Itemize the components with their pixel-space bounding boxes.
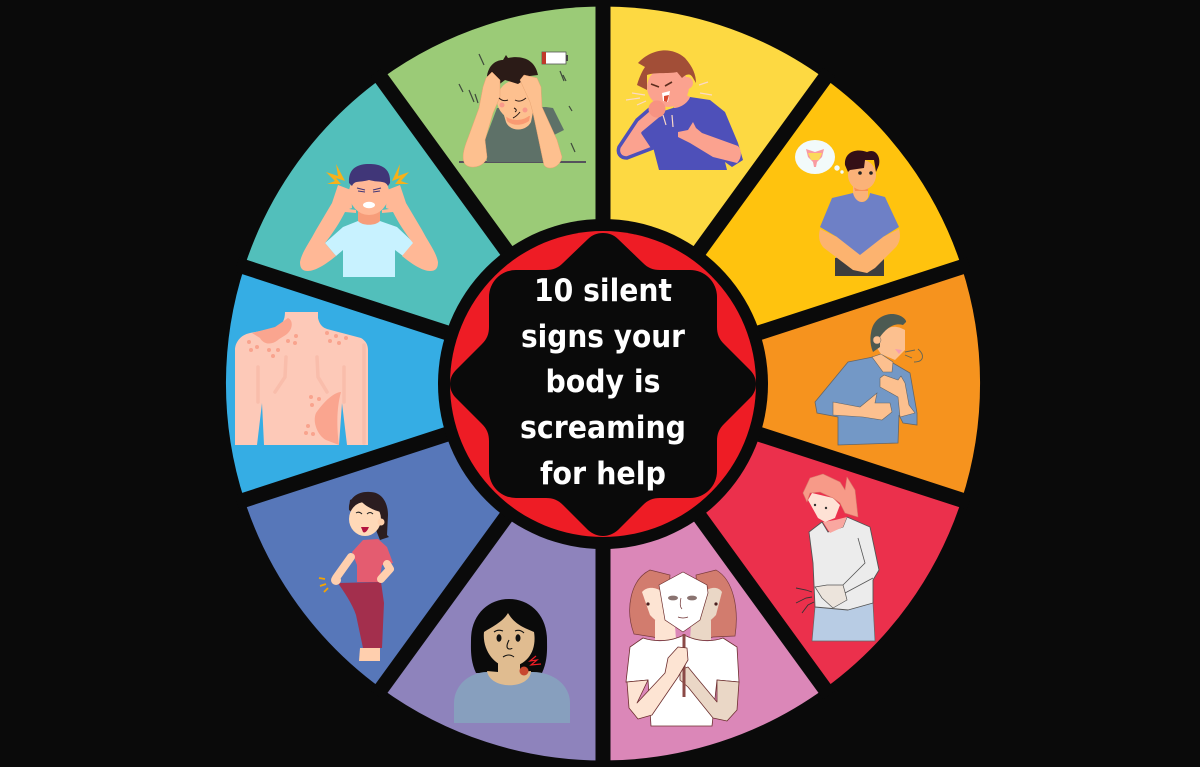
wedge: dark blue	[244, 384, 603, 688]
wedge: pink	[603, 384, 825, 760]
wedge: yellow	[603, 6, 825, 383]
icon: man short of breath	[815, 314, 923, 445]
wedge: red	[603, 384, 962, 688]
icon: battery	[542, 52, 568, 64]
icon: exhausted man with low battery	[459, 52, 586, 168]
title: for help	[540, 456, 666, 492]
title: signs your	[521, 319, 686, 355]
wedge: orange	[603, 267, 980, 500]
icon: man with bladder thought	[795, 140, 900, 276]
icon: coughing man	[618, 50, 743, 170]
title: screaming	[520, 410, 686, 446]
icon: woman hiding behind mask	[626, 570, 739, 726]
wedge: teal	[244, 78, 603, 384]
wedge: green	[381, 6, 603, 384]
title: 10 silent	[534, 273, 672, 309]
icon: woman with loose trousers	[319, 492, 393, 661]
icon: back with skin rash	[235, 312, 368, 445]
wedge: sky blue	[226, 267, 603, 500]
title: body is	[546, 364, 660, 400]
center: red disc	[450, 231, 756, 537]
icon: woman with stomach pain	[796, 474, 879, 641]
icon: man with headache	[300, 164, 438, 277]
center: black ring	[438, 219, 768, 549]
wedge: purple	[381, 384, 603, 761]
title	[520, 273, 686, 492]
wedge: amber	[603, 78, 962, 384]
icon: thought bubble	[795, 140, 844, 174]
icon: woman with sore on neck	[454, 599, 570, 723]
icon: white mask	[659, 572, 708, 632]
center: black star plaque	[450, 233, 756, 536]
